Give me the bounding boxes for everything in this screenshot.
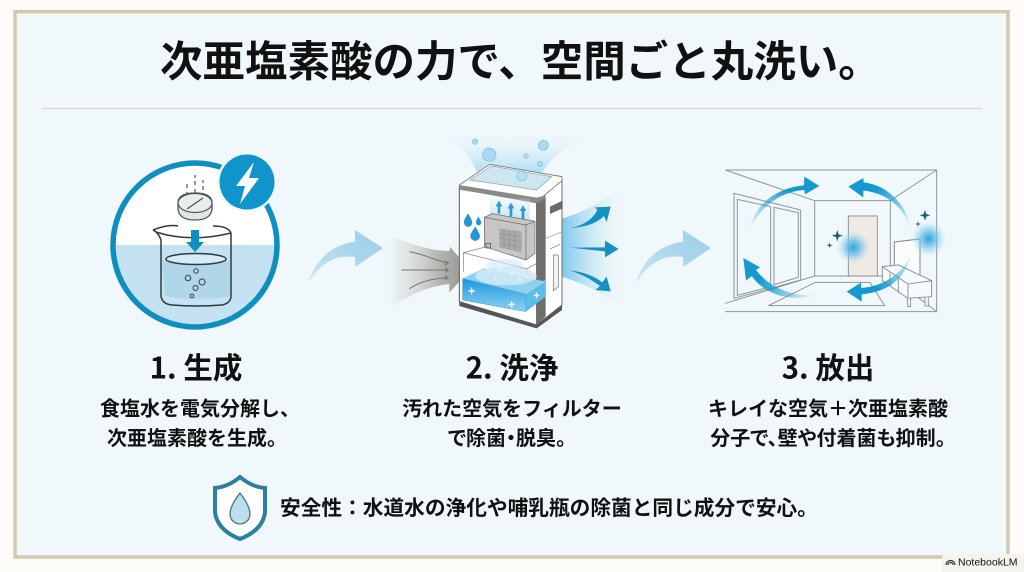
- TV: [894, 239, 920, 276]
- device body: [459, 164, 563, 328]
- step 3 text: [708, 346, 948, 451]
- ascending air: [490, 198, 530, 223]
- water tank: [463, 278, 526, 312]
- icon: step 2 purifier: [392, 132, 622, 328]
- top mist plume: [452, 132, 583, 177]
- icon: lightning badge: [217, 152, 277, 212]
- step 3 text: キレイな空気＋次亜塩素酸: [708, 392, 948, 422]
- step 1 text: 食塩水を電気分解し、: [100, 392, 300, 422]
- mist above water: [475, 259, 537, 285]
- icon: safety shield: [215, 477, 265, 539]
- TV cabinet: [882, 265, 932, 307]
- arrow: step 2 to 3: [636, 230, 711, 283]
- blue flow arrows: [570, 207, 619, 291]
- blue clean air streams: [562, 188, 622, 307]
- arrow: step 1 to 2: [308, 230, 383, 283]
- NotebookLM watermark: [942, 554, 1024, 572]
- NotebookLM watermark: NotebookLM: [958, 556, 1018, 568]
- step 2 text: 汚れた空気をフィルター: [402, 392, 622, 422]
- icon: step 3 room with circulating air: [725, 170, 946, 312]
- room line drawing: [725, 170, 937, 312]
- step 2 text: で除菌・脱臭。: [448, 422, 566, 451]
- bubbles: [472, 139, 548, 181]
- blue glow molecules: [837, 231, 870, 264]
- lower shelf: [463, 247, 546, 280]
- step 2 text: 2. 洗浄: [466, 346, 558, 388]
- step 1 text: 次亜塩素酸を生成。: [107, 422, 287, 451]
- step 2 text: [402, 346, 622, 451]
- step 3 text: 3. 放出: [782, 346, 874, 388]
- safety note: 安全性：水道水の浄化や哺乳瓶の除菌と同じ成分で安心。: [280, 491, 818, 521]
- gray arrows: [401, 252, 448, 289]
- step 1 text: 1. 生成: [150, 346, 242, 388]
- step 3 text: 分子で、壁や付着菌も抑制。: [710, 422, 946, 451]
- filter block: [484, 214, 535, 260]
- step 1 text: [100, 346, 300, 451]
- door: [848, 216, 877, 276]
- icon: step 1 beaker and tablet: [110, 152, 280, 335]
- title: 次亜塩素酸の力で、空間ごと丸洗い。: [160, 28, 881, 90]
- circulation arrows: [743, 177, 912, 302]
- gray dirty air stream: [392, 237, 470, 307]
